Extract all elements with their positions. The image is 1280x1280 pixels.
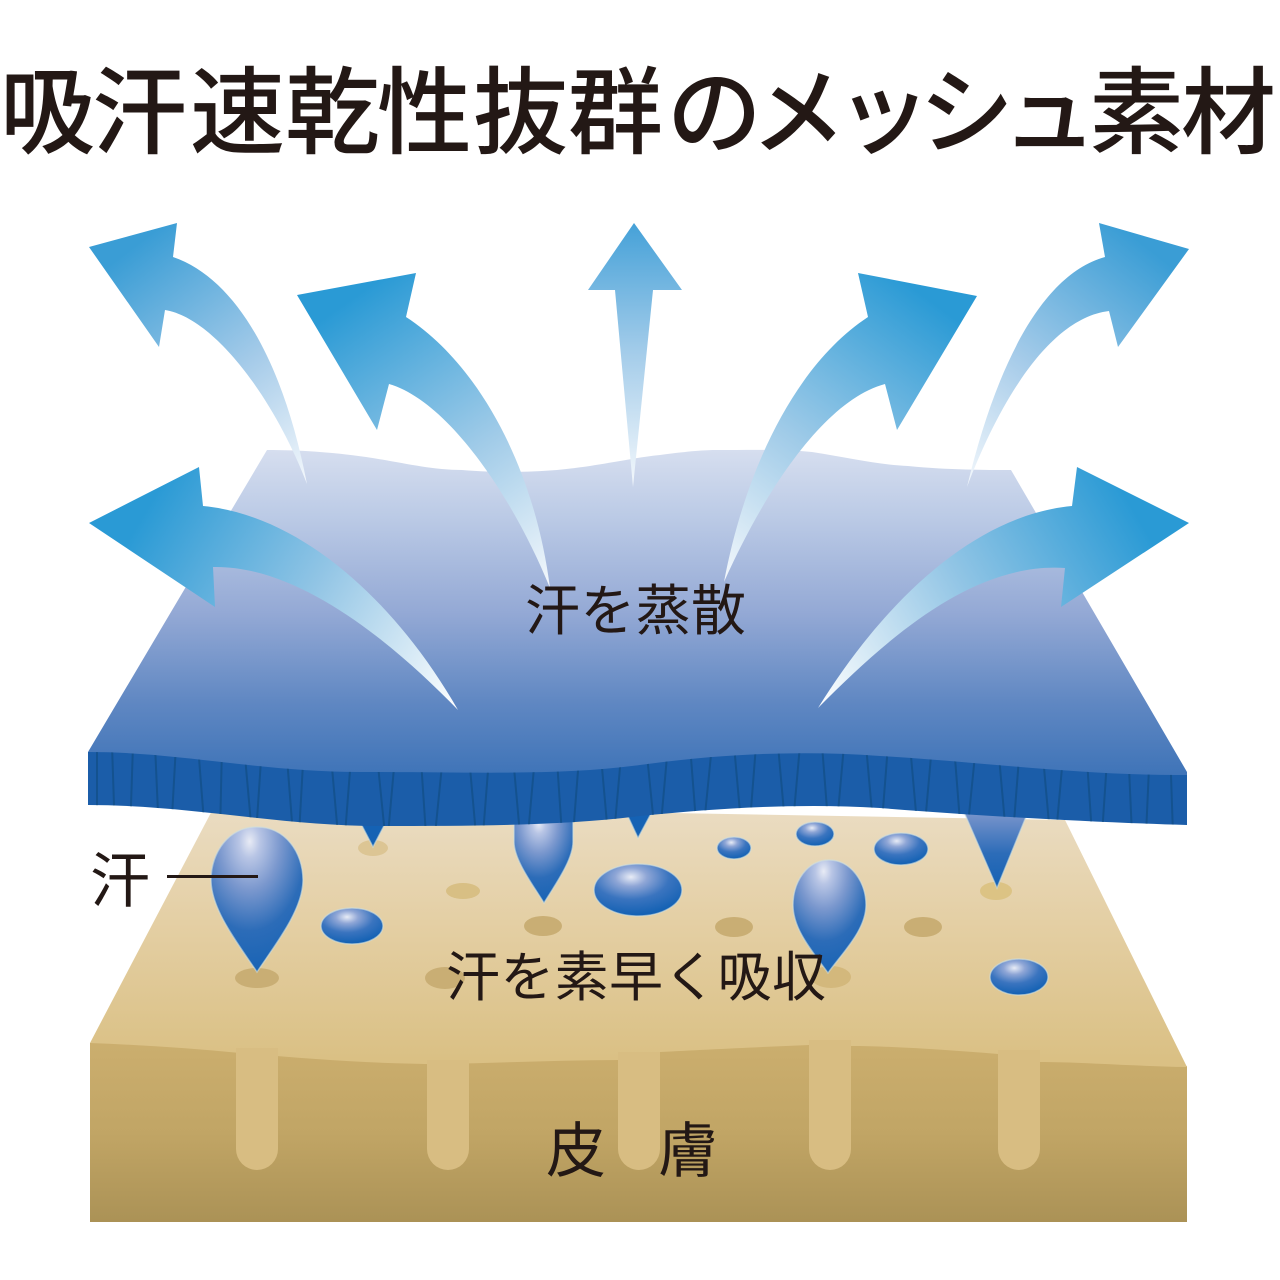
bead 4: [796, 822, 834, 846]
label: skin: 皮膚: [546, 1118, 718, 1185]
sweat drops: [211, 810, 1048, 995]
fabric: [85, 450, 1190, 835]
skin block front: [90, 1040, 1187, 1222]
skin top surface: [90, 805, 1187, 1067]
drop: large left: [211, 827, 303, 972]
arrow: top inner right: [724, 273, 977, 582]
arrow: top centre: [588, 223, 682, 487]
arrow: lower right: [818, 467, 1189, 708]
drop: under fabric 2: [625, 810, 653, 838]
bead 5: [874, 833, 928, 865]
sweat duct 5: [998, 1050, 1040, 1170]
drop: centre left: [514, 815, 573, 903]
drop: right under fabric: [964, 812, 1028, 888]
label: rapid absorption: 汗を素早く吸収: [446, 948, 826, 1008]
sweat duct 1: [236, 1048, 278, 1170]
label: sweat with leader line: 汗: [90, 848, 150, 915]
bead 6: [990, 959, 1048, 995]
bead 1: [321, 908, 383, 944]
sweat duct 2: [427, 1060, 469, 1170]
arrow: top far right: [967, 223, 1189, 487]
fabric top surface: [88, 450, 1187, 800]
drop: large right: [793, 860, 866, 973]
label: sweat with leader line: [90, 848, 258, 915]
skin pores: [235, 840, 1012, 989]
arrow: top inner left: [297, 273, 550, 588]
title: 吸汗速乾性抜群のメッシュ素材: [0, 61, 1276, 167]
arrow: lower left: [89, 467, 458, 710]
label: evaporation: 汗を蒸散: [525, 580, 746, 642]
drop: under fabric 1: [359, 820, 387, 847]
bead 3: [717, 837, 751, 859]
sweat duct 4: [809, 1040, 851, 1170]
fabric front edge: [88, 752, 1187, 826]
bead 2: [594, 864, 682, 916]
skin layer: [90, 805, 1187, 1222]
arrow: top far left: [89, 223, 307, 484]
sweat duct 3: [618, 1052, 660, 1170]
